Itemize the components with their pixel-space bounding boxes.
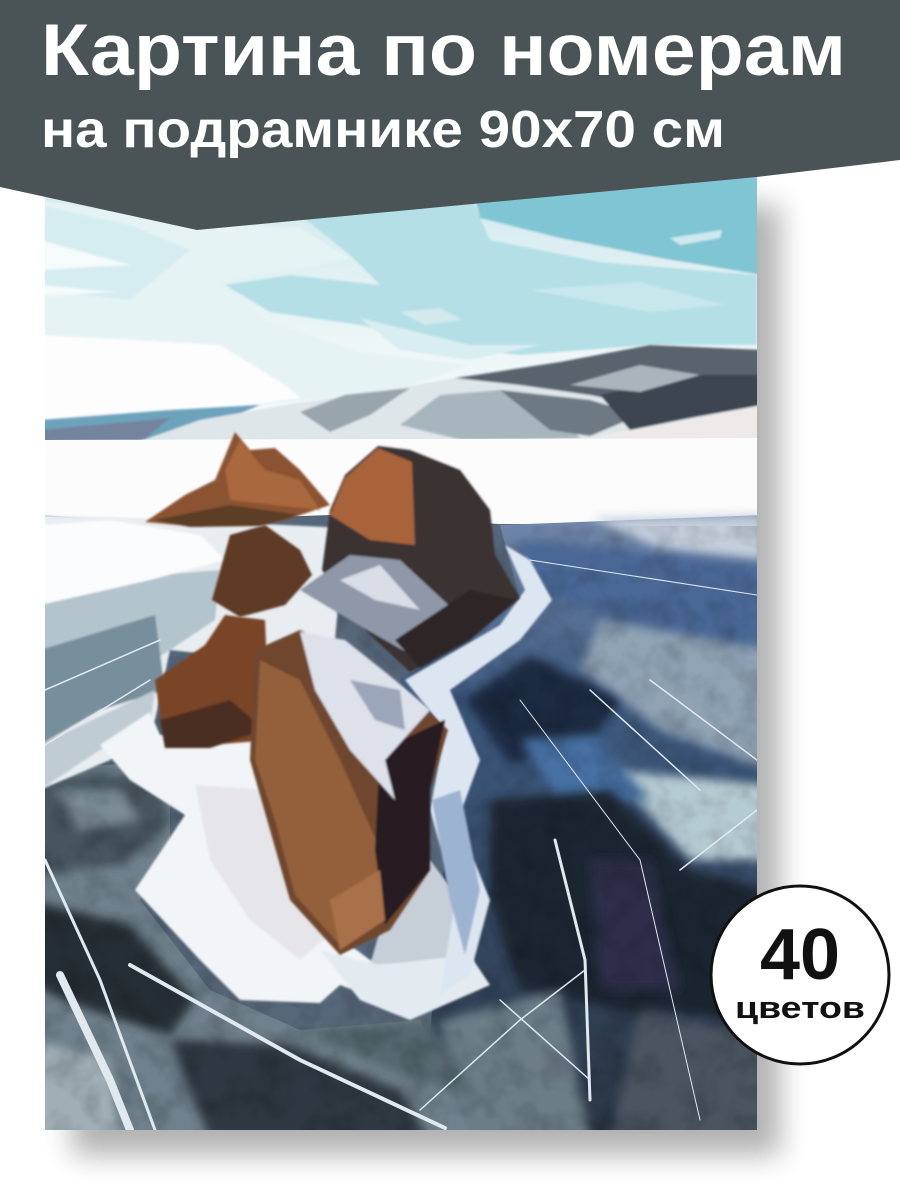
header banner [0,0,900,230]
ice cracks [45,560,757,1130]
back rock [145,432,330,527]
snow field [40,438,762,524]
main rock upper [300,446,520,672]
distant hills [40,345,762,445]
middle small rock [212,525,312,617]
title: Картина по номерам [41,10,846,91]
sky [45,177,757,422]
ice ridge path [405,545,552,995]
badge: 40 colours [711,886,889,1064]
mottled ice texture [45,526,757,1130]
lower left cracked ice [30,760,480,1140]
subtitle: на подрамнике 90х70 см [41,101,725,159]
painting: winter lake Baikal with rocks [30,172,770,1140]
right dark blue ice [400,515,770,1140]
left ice [40,515,345,790]
badge label: цветов [735,990,865,1025]
canvas drop shadow [72,205,780,1155]
main rock lower [250,630,448,955]
shore snow [100,712,490,1020]
lower left rock [155,615,270,748]
badge number: 40 [760,915,840,995]
